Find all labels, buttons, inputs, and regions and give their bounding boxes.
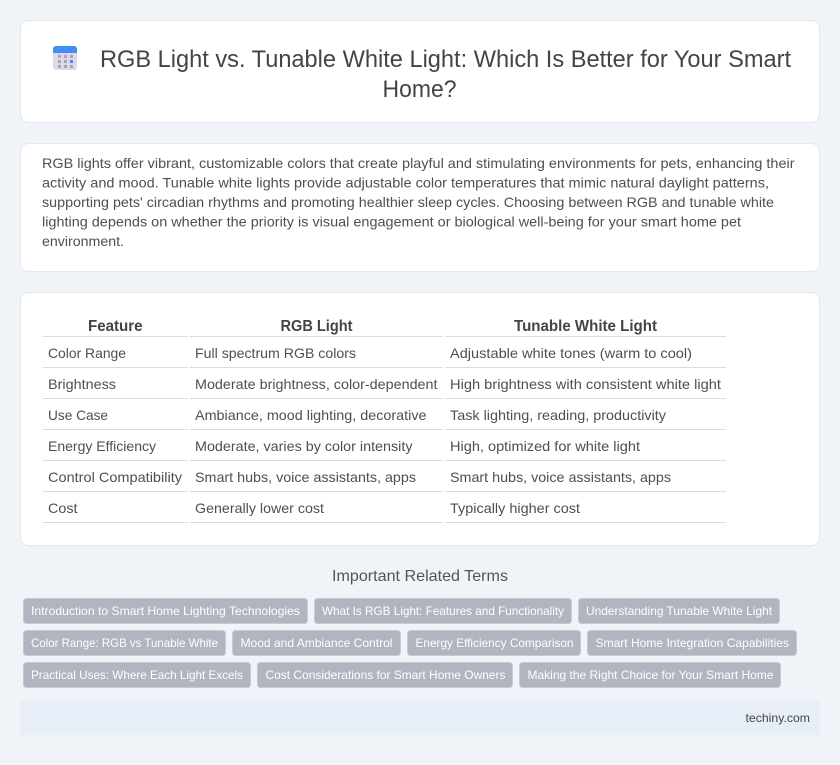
tag [232,630,400,656]
table row: use case: Task lighting, reading, productivity [450,407,666,423]
table row: control compatibility: Smart hubs, voice assistants, apps [450,469,671,485]
tag group: related terms [24,598,796,688]
table row: cost: Generally lower cost [195,500,324,516]
table row: color range: Color Range [48,345,126,361]
heading: important related terms: Important Related Terms [332,568,508,585]
tag: Cost Considerations for Smart Home Owners [266,668,506,682]
tag: Making the Right Choice for Your Smart Home [528,668,774,682]
tag [588,630,796,656]
tag [24,662,250,688]
tag [24,598,308,624]
tag [520,662,780,688]
icon: smart home grid [53,46,77,70]
tag: Smart Home Integration Capabilities [596,636,789,650]
table header row: Feature [88,318,143,335]
table row: control compatibility [48,469,671,485]
table header row: Tunable White Light [514,318,658,335]
table row: energy efficiency: Moderate, varies by color intensity [195,438,412,454]
tag: What Is RGB Light: Features and Functionality [322,604,564,618]
table row: brightness [48,376,721,392]
panel: comparison table [20,292,820,546]
text block: summary: environment. [42,233,124,249]
table row: control compatibility: Smart hubs, voice assistants, apps [195,469,416,485]
text block: summary [42,155,795,249]
table row: use case: Ambiance, mood lighting, decorative [195,407,427,423]
footer bar [20,701,820,735]
tag [408,630,580,656]
tag [314,598,572,624]
table row: cost [48,500,580,516]
tag [578,598,780,624]
table row: color range: Full spectrum RGB colors [195,345,356,361]
table row: color range [48,345,692,361]
table header row: RGB Light [280,318,353,335]
title: RGB Light vs. Tunable White Light: Which Is Better for Your Smart [100,46,791,73]
table row: brightness: Brightness [48,376,116,392]
tag: Mood and Ambiance Control [240,636,392,650]
tag: Understanding Tunable White Light [586,604,773,618]
table row: use case [48,407,666,423]
tag: Introduction to Smart Home Lighting Technologies [31,604,300,618]
footer source: techiny.com [746,711,810,725]
table row: brightness: High brightness with consistent white light [450,376,721,392]
table row: energy efficiency: High, optimized for white light [450,438,640,454]
title: Home? [382,76,456,103]
text block: summary: activity and mood. Tunable white lights provide adjustable color temperatures that mimic natural daylight patterns, [42,174,769,190]
tag [258,662,512,688]
table row: cost: Typically higher cost [450,500,580,516]
tag: Practical Uses: Where Each Light Excels [31,668,243,682]
table row: energy efficiency [48,438,640,454]
table row: energy efficiency: Energy Efficiency [48,438,156,454]
table row: color range: Adjustable white tones (warm to cool) [450,345,692,361]
text block: summary: lighting depends on whether the priority is visual engagement or biological well-being for your smart home pet [42,214,741,230]
tag: Energy Efficiency Comparison [416,636,574,650]
title [100,46,791,103]
table header row [88,318,658,335]
table row: cost: Cost [48,500,78,516]
table row: use case: Use Case [48,407,108,423]
panel: summary paragraph [20,144,820,272]
text block: summary: RGB lights offer vibrant, customizable colors that create playful and stimulating environments for pets, enhancing their [42,155,795,171]
tag: Color Range: RGB vs Tunable White [31,636,218,650]
panel: header [20,20,820,122]
table row: control compatibility: Control Compatibility [48,469,182,485]
text block: summary: supporting pets' circadian rhythms and promoting healthier sleep cycles. Choosing between RGB and tunable white [42,194,774,210]
tag [24,630,226,656]
table row: brightness: Moderate brightness, color-dependent [195,376,438,392]
